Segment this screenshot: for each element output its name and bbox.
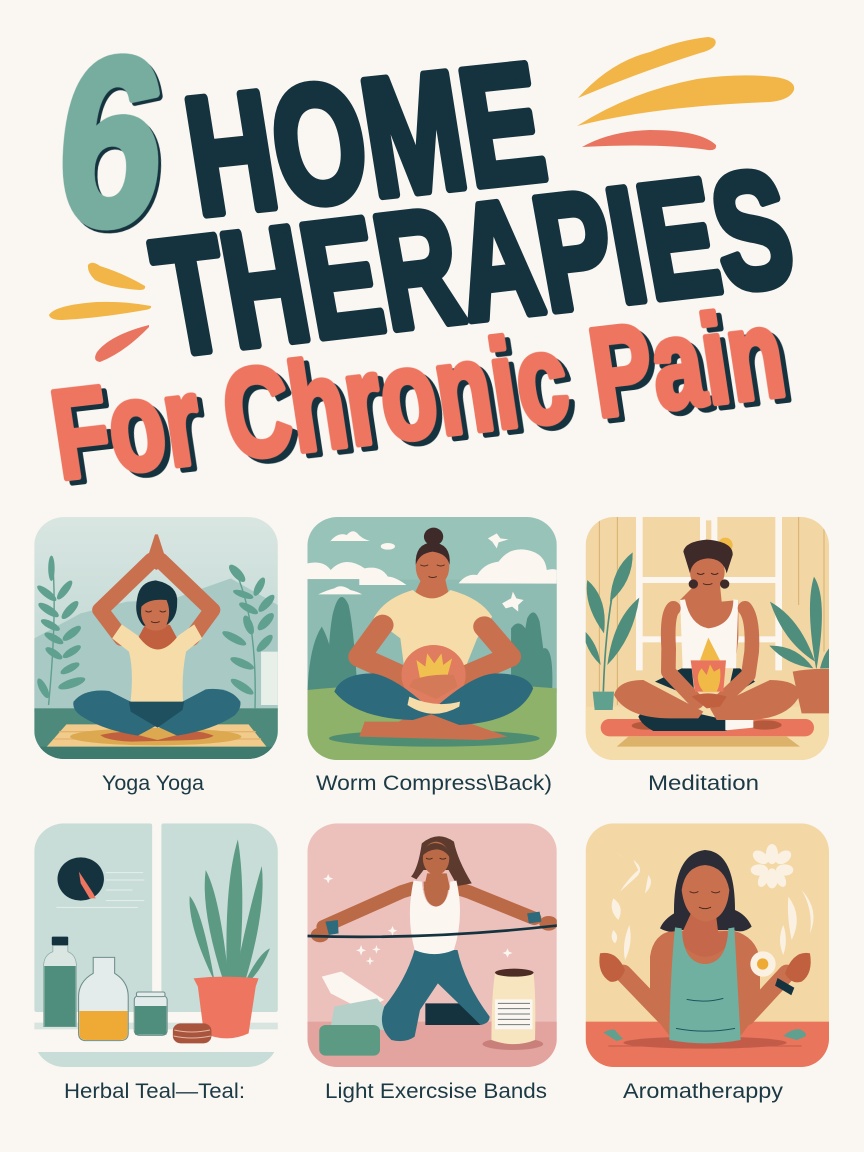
- figure: meditation pose: [614, 538, 801, 731]
- panel: yoga: [34, 517, 278, 759]
- panel: herbal tea: [34, 823, 278, 1067]
- stacked coasters: [173, 1023, 211, 1043]
- left plant: [585, 552, 639, 710]
- mat: [617, 737, 800, 747]
- grass: [307, 684, 557, 760]
- flower: [750, 844, 794, 889]
- swooshes top right: [577, 37, 794, 150]
- right plant and pot: [769, 577, 829, 713]
- figure: aromatherapy pose: [599, 850, 811, 1043]
- figure: warm compress pose: [334, 528, 533, 740]
- trees: [307, 597, 552, 692]
- label: yoga: Yoga Yoga: [102, 772, 204, 795]
- lotus left: [603, 1030, 623, 1041]
- panel: warm compress: [307, 517, 557, 760]
- panel: aromatherapy: [586, 823, 829, 1067]
- plant right: [220, 562, 277, 708]
- numeral 6: 6: [50, 6, 173, 277]
- aroma steam: [612, 852, 814, 960]
- label: meditation: Meditation: [648, 772, 759, 795]
- small jar: [134, 992, 167, 1035]
- bottle: [44, 937, 76, 1027]
- label: warm compress: Worm Compress\Back): [316, 772, 552, 795]
- window: [636, 517, 782, 670]
- jar with tea: [79, 957, 128, 1041]
- yoga mat: [47, 724, 266, 747]
- clouds: [307, 531, 557, 612]
- heading: home: HOME: [174, 28, 556, 251]
- lotus right: [783, 1029, 806, 1040]
- terracotta pot: [194, 977, 259, 1038]
- towel: [322, 972, 384, 1004]
- swooshes left: [49, 263, 151, 362]
- resistance band: [307, 925, 559, 937]
- figure: yoga pose: [73, 534, 240, 742]
- candle jar: [491, 969, 535, 1044]
- figure: band pose: [311, 836, 558, 1041]
- label: aromatherapy: Aromatherappy: [623, 1080, 784, 1103]
- plant left: [35, 556, 87, 705]
- label: light exercise bands: Light Exercsise Bands: [325, 1080, 547, 1103]
- green bag: [319, 1025, 380, 1056]
- sparkles: [323, 874, 512, 965]
- panel: meditation: [585, 517, 829, 760]
- label: herbal tea: Herbal Teal—Teal:: [64, 1080, 245, 1103]
- panel: light exercise bands: [307, 823, 559, 1067]
- snake plant: [190, 839, 270, 982]
- title: [43, 6, 805, 506]
- poster circle: [56, 857, 144, 907]
